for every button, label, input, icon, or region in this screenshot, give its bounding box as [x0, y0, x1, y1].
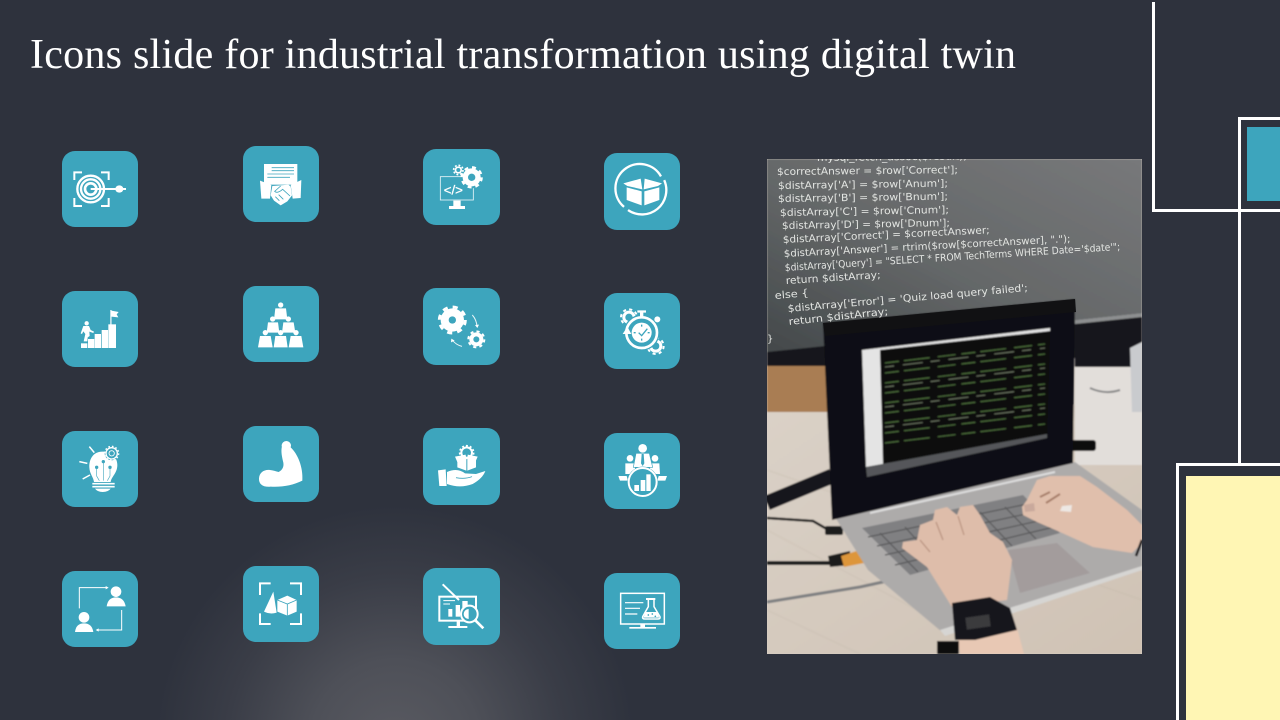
photo: laptop lid top edge over code — [823, 299, 1076, 336]
icon: two people exchange loop — [62, 571, 138, 647]
icon: code monitor with gears: </> — [444, 182, 463, 197]
icon: target with dart — [62, 151, 138, 227]
photo: code lines on monitor: return $distArray; — [788, 307, 889, 328]
photo: code lines on monitor: $distArray['A'] = $row['Anum']; — [778, 179, 948, 192]
icon: flexed arm muscle — [243, 426, 319, 502]
photo: code lines on monitor: $distArray['C'] = $row['Cnum']; — [780, 205, 949, 219]
photo: code lines on monitor: $correctAnswer = $row['Correct']; — [777, 165, 958, 178]
icon: code monitor with gears — [423, 149, 500, 225]
icon: people pyramid — [243, 286, 319, 362]
corner decoration: white frame lines and teal block — [1154, 2, 1280, 463]
icon: box in circular arrows — [604, 153, 680, 230]
photo: code lines on monitor: return $distArray; — [785, 270, 881, 287]
icon: chart monitor with magnifier — [423, 568, 500, 645]
photo: code lines on monitor: else { — [774, 288, 809, 302]
photo: code lines on monitor — [767, 151, 1121, 345]
icon: light bulb with circuit and gear — [62, 431, 138, 507]
icon: handshake with contract — [243, 146, 319, 222]
icon: gears with cycle arrows — [423, 288, 500, 365]
photo: code lines on monitor: } — [767, 334, 773, 345]
photo: code lines on monitor: $distArray['D'] = $row['Dnum']; — [782, 218, 950, 232]
corner decoration: yellow block with white frame — [1178, 464, 1280, 720]
icon: stopwatch with gears — [604, 293, 680, 369]
icon: person climbing steps to flag — [62, 291, 138, 367]
photo: hands typing on laptop in front of code screen — [767, 151, 1142, 654]
photo: code lines on monitor: mysql_fetch_assoc($result); — [817, 151, 967, 164]
icon: 3D shapes in scan frame — [243, 566, 319, 642]
icon: lab flask on monitor — [604, 573, 680, 649]
icon: hand holding box with gear — [423, 428, 500, 505]
photo: code lines on monitor: $distArray['Query'] = "SELECT * FROM TechTerms WHERE Date='$date'"; — [784, 242, 1121, 274]
photo: code lines on monitor: $distArray['Error'] = 'Quiz load query failed'; — [787, 283, 1028, 315]
photo: code lines on monitor: $distArray['Correct'] = $correctAnswer; — [783, 225, 990, 246]
photo: code lines on monitor: $distArray['B'] = $row['Bnum']; — [778, 192, 948, 205]
icon: team with growth chart — [604, 433, 680, 509]
title: Icons slide for industrial transformation using digital twin — [30, 32, 1016, 78]
photo: code lines on monitor: $distArray['Answer'] = rtrim($row[$correctAnswer], "."); — [784, 234, 1071, 260]
